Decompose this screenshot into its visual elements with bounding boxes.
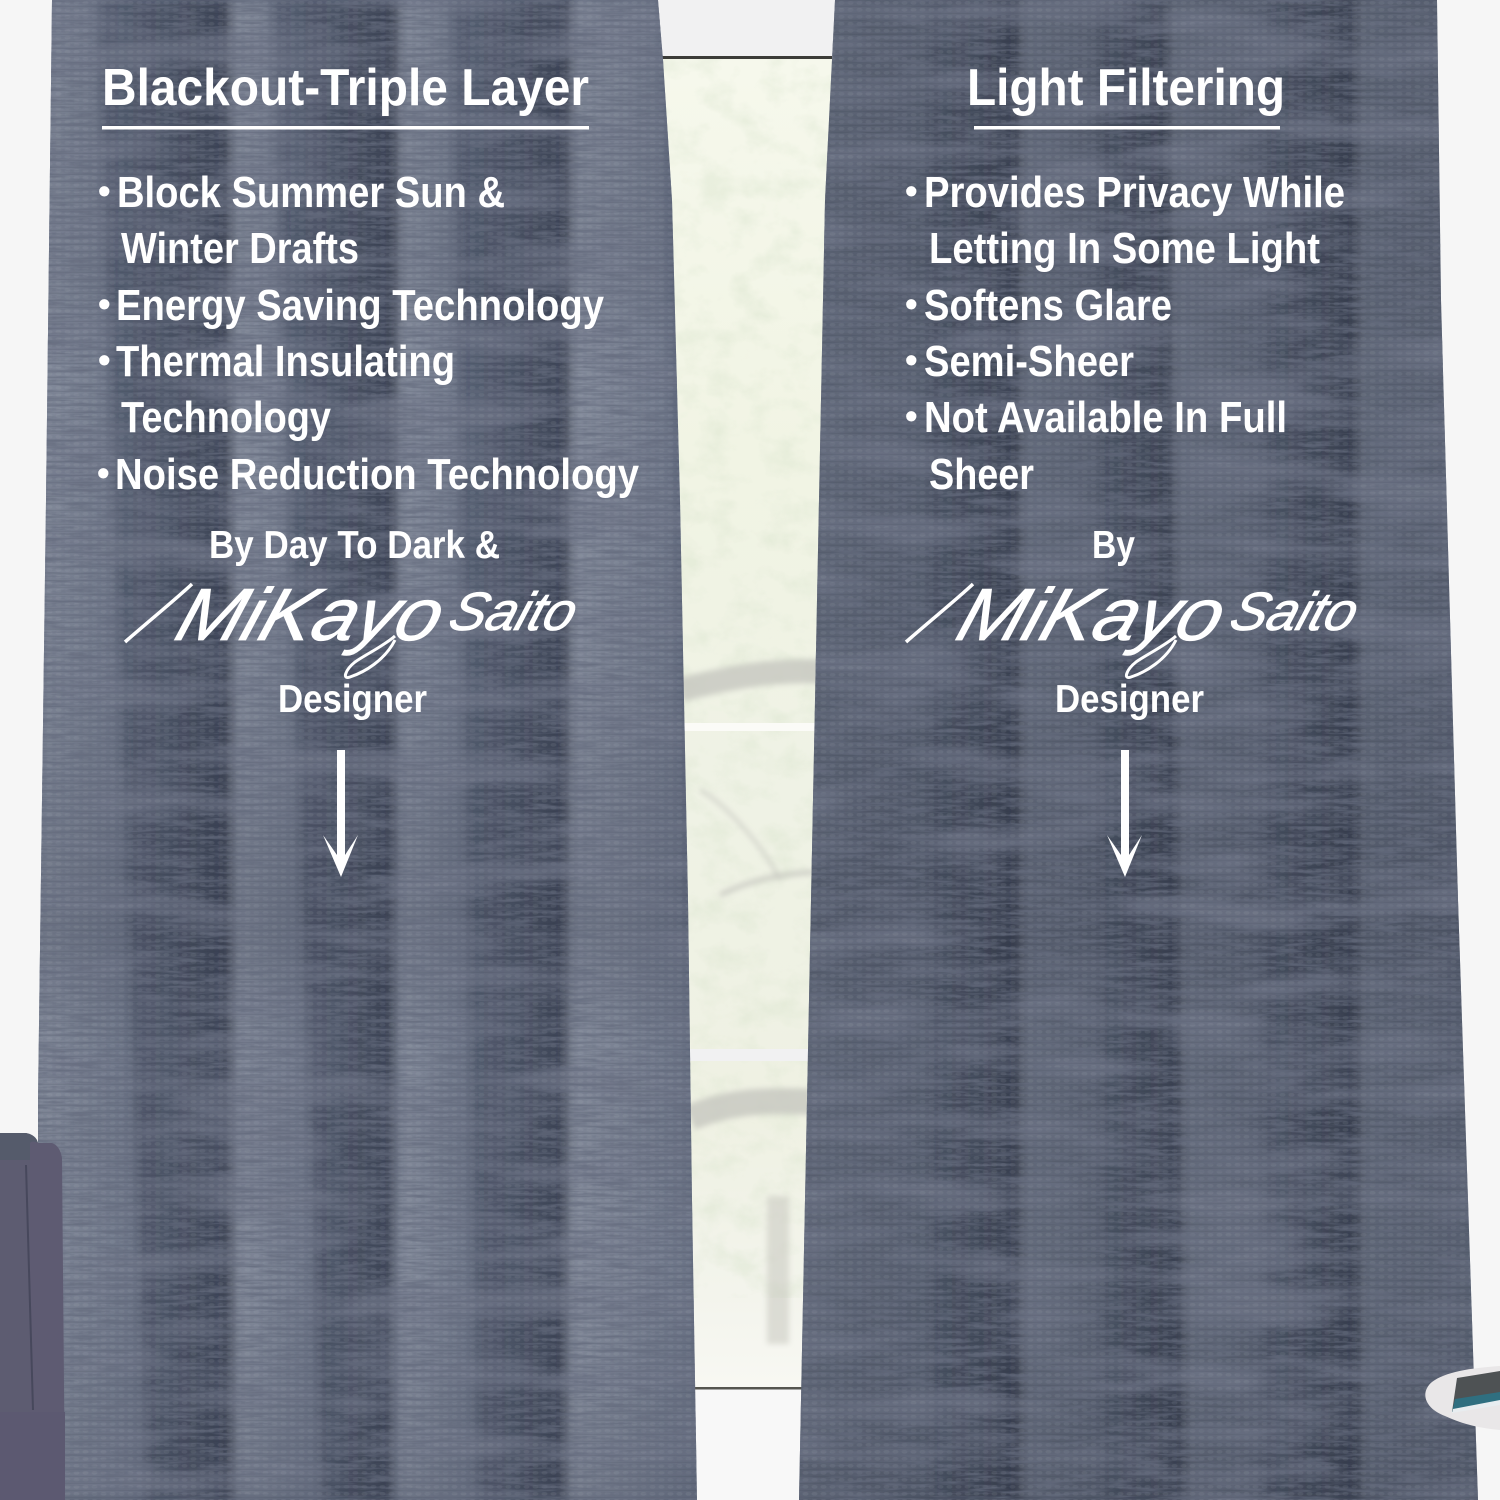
left curtain (30, 0, 710, 1500)
right curtain (790, 0, 1490, 1500)
designer label: Designer (1055, 678, 1204, 721)
fold shading (30, 0, 700, 1500)
feature list: blackout: Energy Saving Technology (116, 281, 604, 330)
feature list: blackout (97, 168, 639, 499)
feature list: blackout: • (97, 452, 110, 493)
feature list: light filtering: Letting In Some Light (929, 224, 1320, 273)
feature list: blackout: Block Summer Sun & (117, 168, 505, 217)
tree branches (680, 671, 830, 1344)
feature list: light filtering: • (905, 170, 918, 211)
designer signature (906, 574, 1367, 678)
armchair (0, 1133, 65, 1500)
heading: Blackout-Triple Layer: Blackout-Triple Layer (102, 59, 589, 117)
credit line: By Day To Dark & (209, 524, 500, 567)
arrow pointing down (1107, 750, 1142, 877)
designer signature: MiKayo (167, 574, 456, 657)
side table with book (1425, 1366, 1500, 1430)
designer label: Designer (278, 678, 427, 721)
feature list: light filtering: Softens Glare (924, 281, 1172, 330)
feature list: light filtering: Not Available In Full (924, 393, 1287, 442)
designer signature: Saito (442, 581, 586, 642)
credit line: By (1092, 524, 1135, 567)
feature list: light filtering: Provides Privacy While (924, 168, 1345, 217)
feature list: blackout: Winter Drafts (121, 224, 359, 273)
heading: Light Filtering: Light Filtering (967, 59, 1285, 117)
fold shading (800, 0, 1414, 1500)
feature list: light filtering: Semi-Sheer (924, 337, 1134, 386)
feature list: light filtering: • (905, 283, 918, 324)
panel text: blackout triple layer (97, 59, 639, 877)
designer signature: MiKayo (948, 574, 1237, 657)
feature list: blackout: Thermal Insulating (116, 337, 455, 386)
feature list: light filtering: • (905, 395, 918, 436)
panel text: light filtering (905, 59, 1367, 877)
feature list: light filtering (905, 168, 1345, 499)
feature list: light filtering: • (905, 339, 918, 380)
feature list: blackout: • (98, 170, 111, 211)
feature list: blackout: Technology (121, 393, 331, 442)
feature list: blackout: • (98, 339, 111, 380)
designer signature: Saito (1223, 581, 1367, 642)
feature list: blackout: Noise Reduction Technology (115, 450, 639, 499)
arrow pointing down (323, 750, 358, 877)
window with garden view (640, 0, 850, 1500)
feature list: light filtering: Sheer (929, 450, 1034, 499)
designer signature (125, 574, 586, 678)
feature list: blackout: • (98, 283, 111, 324)
